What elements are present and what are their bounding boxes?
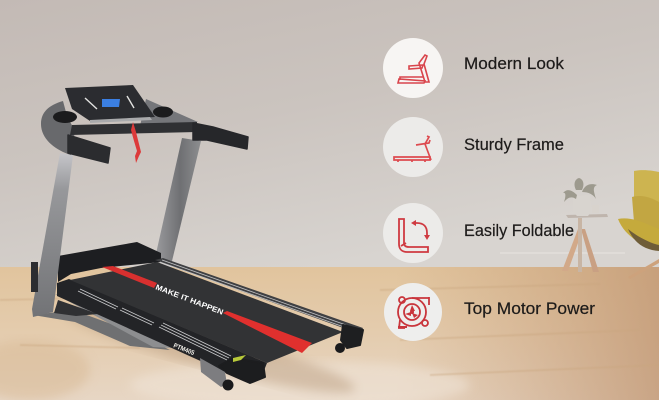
console accents <box>85 96 134 109</box>
model label: PTM405 <box>172 342 196 357</box>
treadmill right upright <box>155 138 201 261</box>
treadmill left upright <box>32 153 73 317</box>
rear end cap <box>341 325 363 348</box>
feature: modern look <box>383 38 565 98</box>
treadmill base frame <box>33 294 173 350</box>
icon: fold arrows <box>383 203 443 263</box>
feature: easily foldable <box>383 203 574 263</box>
side table with plant <box>500 178 625 272</box>
yellow armchair <box>618 170 659 279</box>
console screen <box>102 99 120 107</box>
label: Easily Foldable <box>464 222 574 240</box>
background: wooden floor <box>0 267 659 400</box>
treadmill <box>31 85 363 390</box>
label: Modern Look <box>464 55 565 73</box>
treadmill far rail <box>155 258 363 334</box>
label: Top Motor Power <box>464 300 596 318</box>
right hand grip <box>193 123 248 149</box>
feature: top motor power <box>384 283 596 341</box>
background: wall <box>0 0 659 268</box>
icon: treadmill outline <box>383 38 443 98</box>
red stripe front <box>223 311 312 353</box>
red safety clip <box>131 122 141 163</box>
console buttons <box>90 117 152 123</box>
icon: treadmill side <box>383 117 443 177</box>
feature: sturdy frame <box>383 117 564 177</box>
handlebar cross <box>70 122 197 135</box>
yellow sticker <box>233 355 246 362</box>
treadmill motor cover <box>58 242 161 282</box>
cup holders <box>53 106 173 123</box>
console panel <box>65 85 155 121</box>
treadmill near rail <box>57 279 267 373</box>
console arm grey <box>41 101 75 155</box>
belt slogan: MAKE IT HAPPEN <box>154 282 225 317</box>
red stripe rear <box>102 266 157 288</box>
left hand grip <box>68 135 110 163</box>
label: Sturdy Frame <box>464 136 564 154</box>
icon: motor turbine <box>384 283 442 341</box>
wheels <box>200 343 345 390</box>
treadmill belt <box>70 262 343 363</box>
motor side <box>31 262 38 292</box>
front end cap <box>219 358 265 383</box>
floor shadow <box>60 294 360 400</box>
